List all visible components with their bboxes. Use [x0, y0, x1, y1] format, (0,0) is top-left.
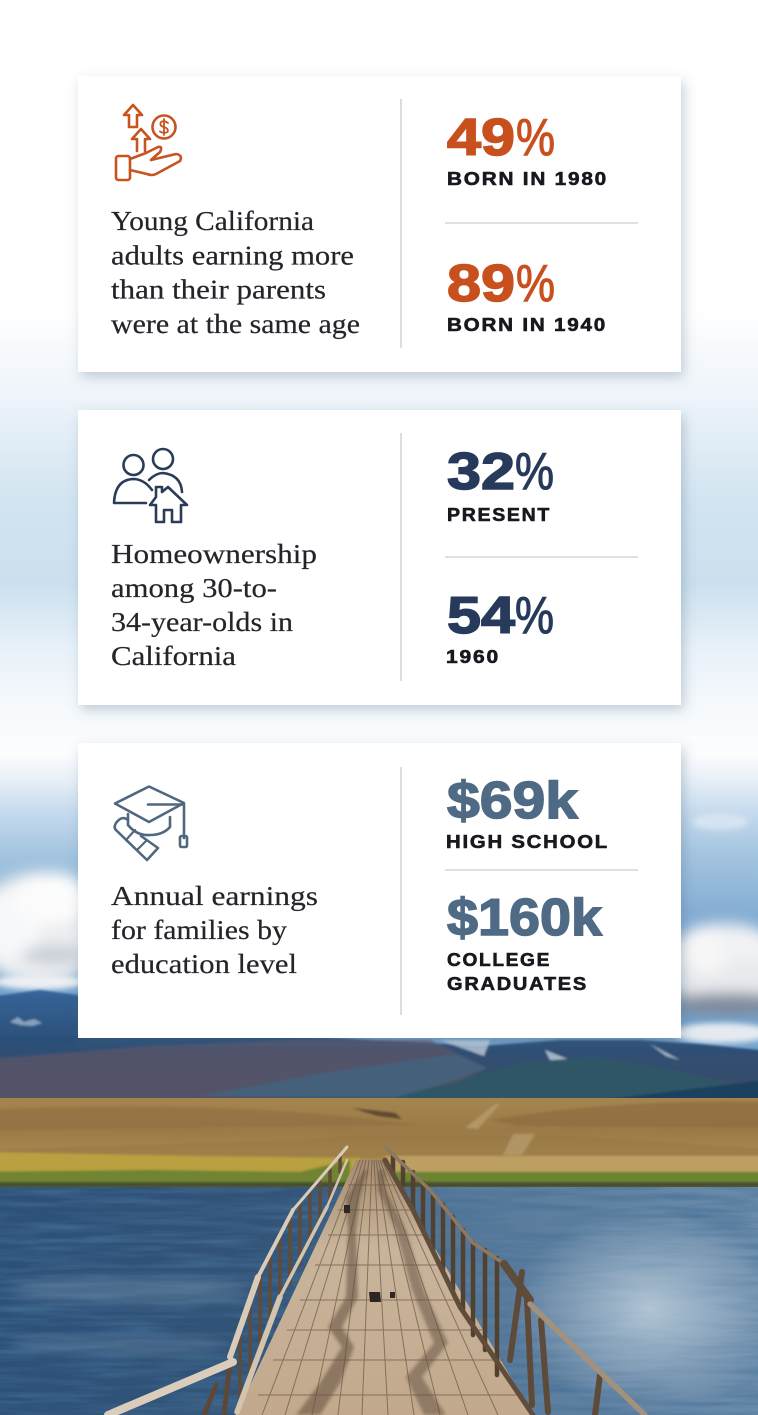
description text: than their parents — [111, 274, 326, 304]
label: college graduates: COLLEGE — [447, 949, 551, 970]
stat: 160k dollars: $160k — [447, 889, 602, 947]
description text: adults earning more — [111, 240, 354, 270]
left railing — [108, 1147, 347, 1415]
label: 1960: 1960 — [446, 646, 500, 667]
right railing — [385, 1147, 645, 1415]
description text: Homeownership — [111, 539, 317, 569]
stat: 54 percent: % — [515, 587, 554, 645]
stat: 49 percent: 49 — [447, 109, 515, 167]
stat: 32 percent — [447, 443, 554, 501]
stat: 54 percent — [447, 587, 554, 645]
description text: education level — [111, 949, 297, 979]
label: born in 1940: BORN IN 1940 — [447, 314, 607, 335]
label: born in 1980: BORN IN 1980 — [447, 168, 608, 189]
description text — [111, 539, 317, 671]
label: present: PRESENT — [447, 504, 551, 525]
grassy river bank — [0, 1160, 758, 1188]
description text: 34-year-olds in — [111, 607, 294, 637]
label: college graduates — [447, 949, 588, 994]
stat: 49 percent: % — [516, 109, 555, 167]
river water — [0, 1187, 758, 1415]
distant mountains — [0, 990, 758, 1104]
label: college graduates: GRADUATES — [447, 973, 588, 994]
stat: 54 percent: 54 — [447, 587, 515, 645]
description text: California — [111, 641, 236, 671]
panel: homeownership — [78, 410, 681, 705]
right cloud — [663, 923, 758, 1043]
description text — [111, 881, 318, 979]
left cloud — [0, 872, 108, 989]
panel: income mobility — [78, 76, 681, 372]
stat: 32 percent: 32 — [447, 443, 515, 501]
stat: 49 percent — [447, 109, 555, 167]
stat: 32 percent: % — [515, 443, 554, 501]
stat: 89 percent: % — [516, 255, 555, 313]
description text: for families by — [111, 915, 288, 945]
panel: earnings by education — [78, 743, 681, 1038]
stat: 89 percent: 89 — [447, 255, 515, 313]
plains — [0, 1098, 758, 1188]
description text: were at the same age — [111, 309, 360, 339]
wooden bridge — [108, 1147, 645, 1415]
stat: 69k dollars: $69k — [447, 772, 578, 830]
icon: hand with rising arrows and coin — [116, 105, 181, 180]
description text: among 30-to- — [111, 573, 277, 603]
label: high school: HIGH SCHOOL — [446, 831, 609, 852]
icon: graduation cap and diploma — [115, 786, 187, 860]
bridge deck — [236, 1160, 533, 1415]
stat: 89 percent — [447, 255, 555, 313]
description text — [111, 206, 360, 339]
description text: Annual earnings — [111, 881, 318, 911]
description text: Young California — [111, 206, 314, 236]
icon: people and house — [114, 449, 187, 522]
